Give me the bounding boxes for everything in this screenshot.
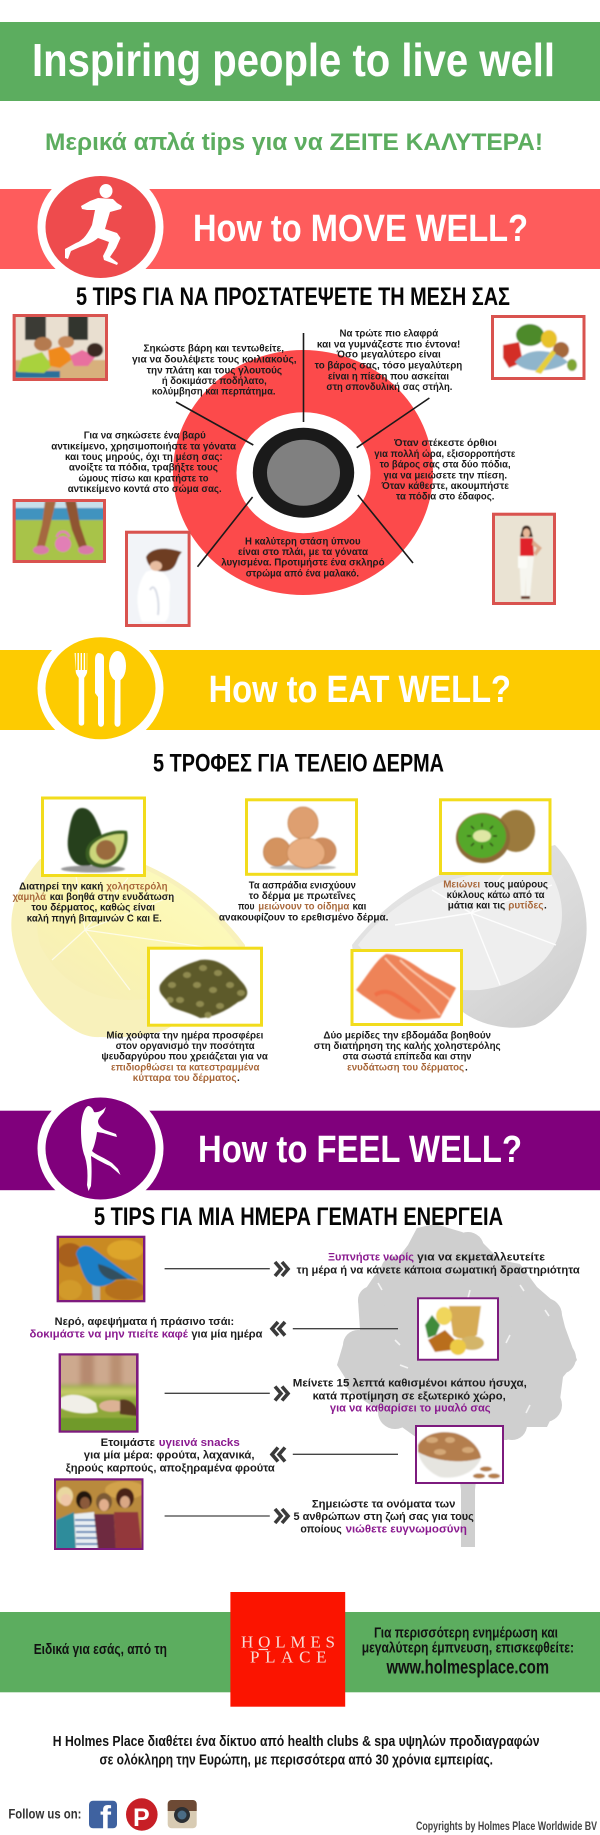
text: avocado: χαμηλά xyxy=(13,892,47,903)
text: sit quietly: Μείνετε 15 λεπτά καθισμένοι κάπου ήσυχα, xyxy=(293,1378,527,1390)
text: wake up early: Ξυπνήστε νωρίς xyxy=(328,1252,414,1264)
social: follow us xyxy=(8,1798,197,1835)
text: lifting object tip: Για να σηκώσετε ένα βαρύ xyxy=(84,431,206,442)
text: lift weights tip: Σηκώστε βάρη και τεντωθείτε, xyxy=(144,344,284,355)
text: salmon xyxy=(314,1030,501,1073)
background: grey tree xyxy=(337,1224,577,1547)
text: sleep tip: Η καλύτερη στάση ύπνου xyxy=(245,536,361,547)
food card: avocado xyxy=(42,798,144,876)
heading: 5 foods: 5 ΤΡΟΦΕΣ ΓΙΑ ΤΕΛΕΙΟ ΔΕΡΜΑ xyxy=(153,750,444,778)
paragraph: about Holmes Place: σε ολόκληρη την Ευρώπη, με περισσότερα από 30 χρόνια εμπειρίας. xyxy=(100,1751,493,1768)
text: standing tip xyxy=(374,438,516,503)
text: eggs: ανακουφίζουν το ερεθισμένο δέρμα. xyxy=(219,912,389,923)
text: eggs: Τα ασπράδια ενισχύουν xyxy=(249,880,356,891)
text: salmon: στη διατήρηση της καλής χοληστερόλης xyxy=(314,1041,501,1052)
section banner: feel well xyxy=(0,1088,600,1208)
photo: group of friends xyxy=(54,1478,145,1550)
background: yellow lemon xyxy=(11,859,245,1037)
text: standing tip: Όταν στέκεστε όρθιοι xyxy=(393,438,497,449)
text: lifting object tip: και τους μηρούς, όχι τη μέση σας: xyxy=(65,452,223,463)
text: lift weights tip: κολύμβηση και περπάτημα. xyxy=(152,387,276,398)
text: healthy snacks: υγιεινά snacks xyxy=(159,1437,240,1449)
photo: tea and honey xyxy=(417,1297,499,1361)
footer band: Holmes Place xyxy=(0,1592,600,1707)
text: kiwi: . xyxy=(544,901,547,912)
paragraph: about Holmes Place xyxy=(53,1733,540,1768)
text: wake up early: τη μέρα ή να κάνετε κάποια σωματική δραστηριότητα xyxy=(297,1264,580,1276)
text: eat lighter tip: είναι η πίεση που ασκείται xyxy=(328,371,449,382)
text: lifting object tip: ανοίξτε τα πόδια, τραβήξτε τους xyxy=(69,463,218,474)
text: standing tip: Όταν κάθεστε, ακουμπήστε xyxy=(381,481,509,492)
text: wake up early xyxy=(297,1252,580,1276)
icon: dancer xyxy=(81,1106,120,1191)
text: pumpkin seeds: . xyxy=(237,1073,240,1084)
arrow: left 1 xyxy=(272,1322,398,1336)
logo: Holmes Place: PLACE xyxy=(250,1648,326,1667)
arrow: right 1 xyxy=(165,1262,288,1276)
icon: pinterest: P xyxy=(133,1804,150,1832)
text: eggs: το δέρμα με πρωτεΐνες xyxy=(249,890,356,902)
text: water and green tea xyxy=(30,1316,263,1341)
text: avocado: Διατηρεί την κακή xyxy=(19,881,103,892)
text: eat lighter tip: στη σπονδυλική σας στήλη. xyxy=(326,382,453,393)
logo: Holmes Place xyxy=(230,1592,345,1707)
text: lifting object tip: αντικείμενο, χρησιμοποιήστε τα γόνατα xyxy=(51,442,237,453)
text: wake up early: για να εκμεταλλευτείτε xyxy=(417,1252,546,1264)
text: eggs xyxy=(219,880,389,923)
photo: sit-ups class xyxy=(13,314,108,381)
text: pumpkin seeds: ψευδαργύρου που χρειάζεται για να xyxy=(101,1052,269,1063)
text: kiwi: τους μαύρους xyxy=(484,879,548,890)
text: lift weights tip: ή δοκιμάστε ποδήλατο, xyxy=(162,376,267,387)
arrow: right 2 xyxy=(165,1386,288,1400)
text: gratitude: νιώθετε ευγνωμοσύνη xyxy=(346,1523,467,1535)
text: lift weights tip: για να δουλέψετε τους κοιλιακούς, xyxy=(132,355,297,366)
icon: instagram xyxy=(168,1800,197,1828)
text: salmon: . xyxy=(465,1062,468,1073)
text: kiwi: κύκλους κάτω από τα xyxy=(447,890,545,901)
text: eggs: που xyxy=(238,902,255,913)
arrow: left 2 xyxy=(272,1448,398,1462)
icon: runner xyxy=(65,184,122,265)
banner: Inspiring people to live well xyxy=(0,22,600,101)
text: eat lighter tip xyxy=(315,329,462,393)
text: lift weights tip xyxy=(132,344,297,398)
text: water and green tea: για μία ημέρα xyxy=(191,1329,263,1341)
text: pumpkin seeds: επιδιορθώσει τα κατεστραμμένα xyxy=(111,1062,260,1073)
text: sleep tip: είναι στο πλάι, με τα γόνατα xyxy=(238,547,369,558)
photo: blue bird xyxy=(56,1235,146,1303)
text: pumpkin seeds: στον οργανισμό την ποσότητα xyxy=(116,1041,255,1052)
food card: pumpkin seeds xyxy=(148,948,262,1025)
food card: salmon xyxy=(352,950,462,1024)
footer band: Holmes Place: Ειδικά για εσάς, από τη xyxy=(34,1641,167,1658)
text: sleep tip xyxy=(221,536,385,579)
text: gratitude xyxy=(294,1498,474,1535)
text: healthy snacks xyxy=(66,1437,275,1474)
text: eggs: μειώνουν το οίδημα xyxy=(258,902,350,913)
text: kiwi: Μειώνει xyxy=(443,879,480,890)
text: healthy snacks: Ετοιμάστε xyxy=(101,1437,156,1449)
text: water and green tea: Νερό, αφεψήματα ή πράσινο τσάι: xyxy=(55,1316,234,1328)
text: sit quietly: κατά προτίμηση σε εξωτερικό χώρο, xyxy=(313,1390,506,1402)
photo: kettlebell on beach xyxy=(13,499,106,563)
food card: eggs xyxy=(246,800,356,874)
text: pumpkin seeds: Μία χούφτα την ημέρα προσφέρει xyxy=(106,1030,264,1041)
photo: woman on grass xyxy=(50,1345,148,1440)
photo: woman standing in red top xyxy=(490,512,556,606)
text: eat lighter tip: και να γυμνάζεστε πιο έντονα! xyxy=(317,339,460,350)
text: standing tip: για να μειώσετε την πίεση. xyxy=(384,470,507,481)
text: eat lighter tip: το βάρος σας, τόσο μεγαλύτερη xyxy=(315,361,462,372)
text: kiwi xyxy=(443,879,548,912)
text: kiwi: ρυτίδες xyxy=(508,901,543,912)
text: gratitude: οποίους xyxy=(300,1523,342,1535)
text: healthy snacks: για μία μέρα: φρούτα, λαχανικά, xyxy=(84,1450,254,1462)
icon: fork knife spoon xyxy=(75,651,126,727)
text: lifting object tip xyxy=(51,431,237,495)
text: pumpkin seeds xyxy=(101,1030,269,1084)
logo: Holmes Place: HOLMES xyxy=(241,1633,335,1652)
footer band: Holmes Place: Για περισσότερη ενημέρωση και xyxy=(374,1624,558,1641)
text: salmon: Δύο μερίδες την εβδομάδα βοηθούν xyxy=(323,1030,491,1041)
text: kiwi: μάτια και τις xyxy=(448,901,505,912)
icon: facebook xyxy=(89,1799,117,1835)
donut diagram xyxy=(173,333,433,595)
text: eat lighter tip: Όσο μεγαλύτερο είναι xyxy=(336,350,441,361)
text: standing tip: τα πόδια στο έδαφος. xyxy=(396,492,495,503)
photo: woman sleeping on side xyxy=(125,530,191,628)
text: salmon: ενυδάτωση του δέρματος xyxy=(347,1062,464,1073)
text: avocado xyxy=(13,881,174,924)
text: eat lighter tip: Να τρώτε πιο ελαφρά xyxy=(340,329,439,340)
social: follow us: Follow us on: xyxy=(8,1805,81,1821)
icon: facebook: f xyxy=(100,1799,112,1835)
text: lifting object tip: ώμους πίσω και κρατήστε το xyxy=(78,473,208,484)
subtitle: Μερικά απλά tips για να ΖΕΙΤΕ ΚΑΛΥΤΕΡΑ! xyxy=(45,129,543,156)
arrow: right 3 xyxy=(165,1509,288,1523)
food card: kiwi xyxy=(440,800,550,874)
text: avocado: και βοηθά στην ενυδάτωση xyxy=(50,892,174,903)
section banner: move well: How to MOVE WELL? xyxy=(193,208,528,250)
photo: bowl of almonds xyxy=(415,1425,504,1485)
text: avocado: του δέρματος, καθώς είναι xyxy=(31,903,155,914)
text: standing tip: το βάρος σας στα δύο πόδια, xyxy=(380,460,511,471)
heading: 5 tips energy: 5 TIPS ΓΙΑ ΜΙΑ ΗΜΕΡΑ ΓΕΜΑΤΗ ΕΝΕΡΓΕΙΑ xyxy=(94,1203,503,1231)
text: lift weights tip: την πλάτη και τους γλουτούς xyxy=(147,365,282,376)
text: sleep tip: στρώμα από ένα μαλακό. xyxy=(246,568,359,579)
text: water and green tea: δοκιμάστε να μην πιείτε καφέ xyxy=(30,1329,189,1341)
text: sleep tip: λυγισμένα. Προτιμήστε ένα σκληρό xyxy=(221,558,385,569)
text: avocado: καλή πηγή βιταμινών C και Ε. xyxy=(27,913,162,924)
text: salmon: στα σωστά επίπεδα και στην xyxy=(342,1052,472,1063)
text: gratitude: Σημειώστε τα ονόματα των xyxy=(312,1498,455,1510)
photo: healthy food and tape xyxy=(490,315,586,381)
text: standing tip: για πολλή ώρα, εξισορροπήστε xyxy=(374,449,516,460)
background: grey lemon xyxy=(352,845,587,1028)
text: sit quietly: για να καθαρίσει το μυαλό σας xyxy=(330,1403,491,1415)
text: eggs: και xyxy=(352,902,367,913)
text: pumpkin seeds: κύτταρα του δέρματος xyxy=(133,1073,236,1084)
text: healthy snacks: ξηρούς καρπούς, αποξηραμένα φρούτα xyxy=(66,1462,275,1474)
section banner: eat well xyxy=(0,628,600,748)
section banner: eat well: How to EAT WELL? xyxy=(209,669,511,711)
text: avocado: χοληστερόλη xyxy=(106,881,168,892)
section banner: feel well: How to FEEL WELL? xyxy=(198,1129,522,1171)
icon: pinterest xyxy=(126,1798,158,1832)
text: lifting object tip: αντικείμενο κοντά στο σώμα σας. xyxy=(68,484,222,495)
text: gratitude: 5 ανθρώπων στη ζωή σας για τους xyxy=(294,1511,474,1523)
section banner: move well xyxy=(0,167,600,287)
footer band: Holmes Place: www.holmesplace.com xyxy=(386,1657,549,1678)
text: sit quietly xyxy=(293,1378,527,1415)
